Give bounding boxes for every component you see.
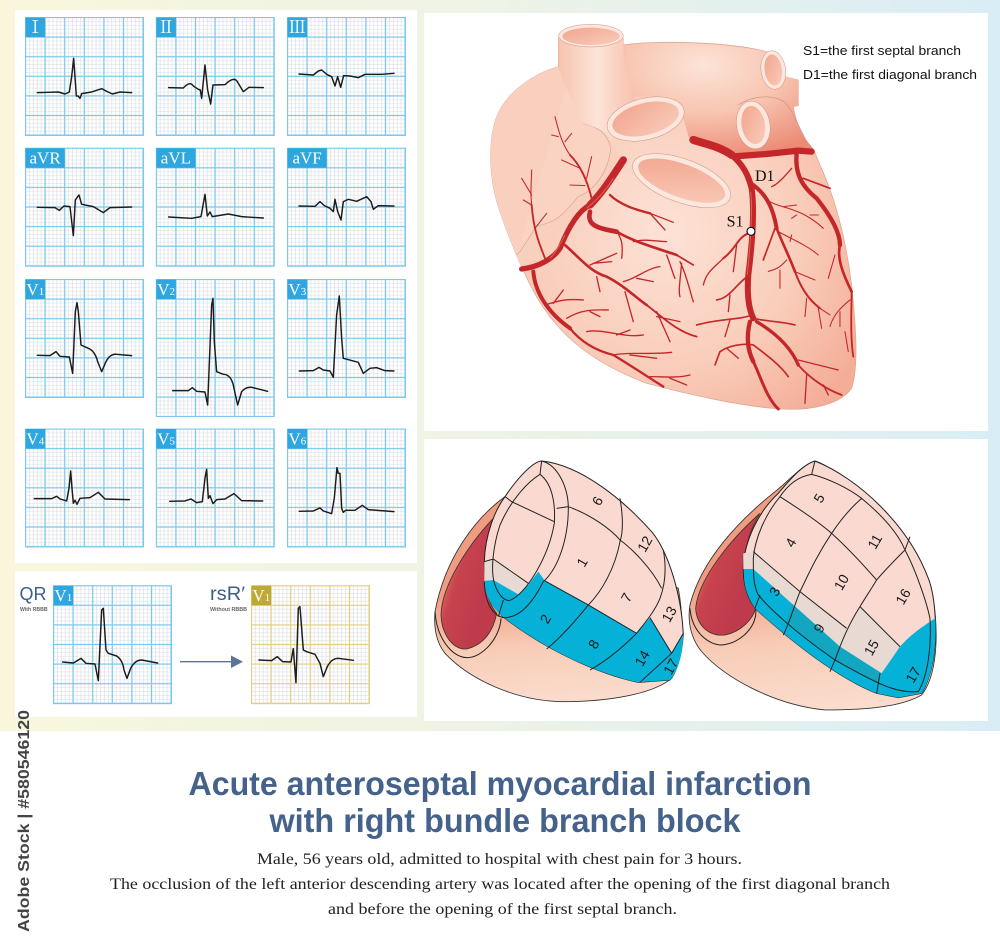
label: rsR prime without RBBB: rsR′ — [210, 584, 245, 605]
coronary arteries — [522, 117, 853, 409]
ECG: V1 without RBBB — [252, 586, 370, 704]
pulmonary orifice — [602, 89, 689, 149]
lead I — [26, 18, 144, 136]
legend — [803, 44, 977, 82]
pulmonary trunk — [624, 43, 814, 156]
lead aVR: aVR — [30, 149, 61, 168]
aortic opening — [559, 24, 623, 47]
segment numbers — [766, 491, 924, 686]
lead V4 — [26, 429, 144, 547]
occlusion marker S1 — [747, 227, 755, 235]
lead aVL: aVL — [161, 149, 191, 168]
lead V1: V1 — [26, 280, 44, 299]
lead V6: V6 — [288, 430, 307, 448]
segment face — [484, 461, 683, 682]
segment numbers: 16 — [892, 586, 914, 607]
rim — [690, 608, 756, 645]
segment numbers: 13 — [658, 603, 680, 625]
description text: The occlusion of the left anterior descending artery was located after the opening of the first diagonal branch — [110, 876, 890, 893]
illustration: heart — [491, 24, 856, 409]
segment numbers: 14 — [631, 647, 653, 669]
legend: S1=the first septal branch — [803, 44, 961, 58]
left ventricle model: left view — [435, 461, 683, 702]
segment numbers: 9 — [810, 621, 828, 636]
lead II — [156, 18, 274, 136]
segment numbers: 17 — [660, 656, 682, 677]
segment numbers: 6 — [588, 493, 606, 508]
lead aVL — [156, 148, 274, 266]
segment numbers: 15 — [861, 637, 882, 658]
segment lines — [484, 461, 683, 682]
lead V2: V2 — [157, 280, 175, 299]
cavity — [696, 513, 760, 635]
segment numbers: 5 — [810, 491, 828, 506]
segment numbers: 12 — [634, 533, 656, 555]
label D1: D1 — [755, 168, 775, 185]
arrow — [180, 656, 243, 668]
left ventricle model: right view — [689, 461, 936, 710]
lead V1 — [26, 280, 144, 398]
cavity — [441, 518, 497, 649]
gray strip — [484, 559, 528, 594]
lead I: Ⅰ — [27, 18, 44, 37]
description text — [110, 851, 890, 918]
lead V2 — [156, 280, 274, 416]
label: rsR prime without RBBB: Without RBBB — [210, 607, 247, 613]
segment lines — [753, 461, 930, 693]
label: QR with RBBB — [20, 584, 48, 613]
lead V3 — [288, 280, 406, 398]
segment numbers: 3 — [766, 584, 784, 599]
panel: V1 comparison QR to rsR prime — [15, 571, 417, 717]
pulmonary vein openings — [758, 49, 788, 91]
title — [188, 765, 812, 839]
right atrium — [491, 67, 623, 267]
heart body — [491, 38, 856, 409]
lead V4: V4 — [26, 430, 45, 448]
segment numbers: 11 — [864, 531, 885, 552]
aortic valve orifice — [626, 143, 738, 219]
blue infarct zone — [744, 569, 936, 698]
panel: 17-segment myocardial model — [424, 439, 988, 721]
lead V5 — [156, 429, 274, 547]
segment numbers: 7 — [617, 590, 635, 605]
outer shell — [435, 497, 682, 702]
title: Acute anteroseptal myocardial infarction — [188, 765, 812, 802]
title: with right bundle branch block — [269, 802, 741, 839]
segment numbers: 2 — [536, 611, 554, 626]
lead III — [288, 18, 406, 136]
lead V3: V3 — [288, 280, 307, 299]
segment numbers: 10 — [831, 571, 852, 593]
pulmonary vein lobe — [738, 97, 810, 147]
artery highlight — [550, 178, 752, 275]
background band — [0, 0, 1000, 731]
segment numbers: 17 — [902, 664, 924, 686]
lead V6 — [288, 429, 406, 547]
label S1: S1 — [727, 213, 744, 230]
ECG: V1 without RBBB: V1 — [252, 586, 270, 605]
lead V5: V5 — [157, 430, 175, 448]
outer shell — [689, 461, 936, 710]
lead aVR — [26, 148, 144, 266]
atrial appendage — [517, 81, 611, 255]
lead II: Ⅱ — [158, 18, 175, 37]
lead III: Ⅲ — [289, 18, 306, 37]
aorta tube — [558, 35, 637, 142]
segment numbers — [536, 493, 682, 677]
rim — [435, 612, 501, 658]
label: QR with RBBB: With RBBB — [20, 607, 48, 613]
panel: heart with coronary arteries — [424, 13, 988, 431]
description text: and before the opening of the first septal branch. — [328, 901, 677, 918]
description text: Male, 56 years old, admitted to hospital with chest pain for 3 hours. — [257, 851, 742, 868]
ECG: V1 with RBBB — [54, 586, 172, 704]
label: rsR prime without RBBB — [210, 584, 247, 613]
legend: D1=the first diagonal branch — [803, 68, 977, 82]
segment face — [743, 461, 936, 698]
ECG: V1 with RBBB: V1 — [54, 586, 72, 605]
dark band — [787, 603, 882, 683]
gray strip — [743, 552, 900, 673]
blue infarct zone — [484, 572, 683, 682]
segment numbers: 1 — [573, 555, 591, 570]
segment numbers: 8 — [585, 637, 603, 652]
segment numbers: 4 — [782, 535, 800, 550]
stock credit: Adobe Stock | #580546120 — [16, 710, 33, 932]
label: QR with RBBB: QR — [20, 584, 47, 604]
lead aVF: aVF — [292, 149, 322, 168]
panel: twelve-lead ECG — [15, 10, 417, 563]
lead aVF — [288, 148, 406, 266]
